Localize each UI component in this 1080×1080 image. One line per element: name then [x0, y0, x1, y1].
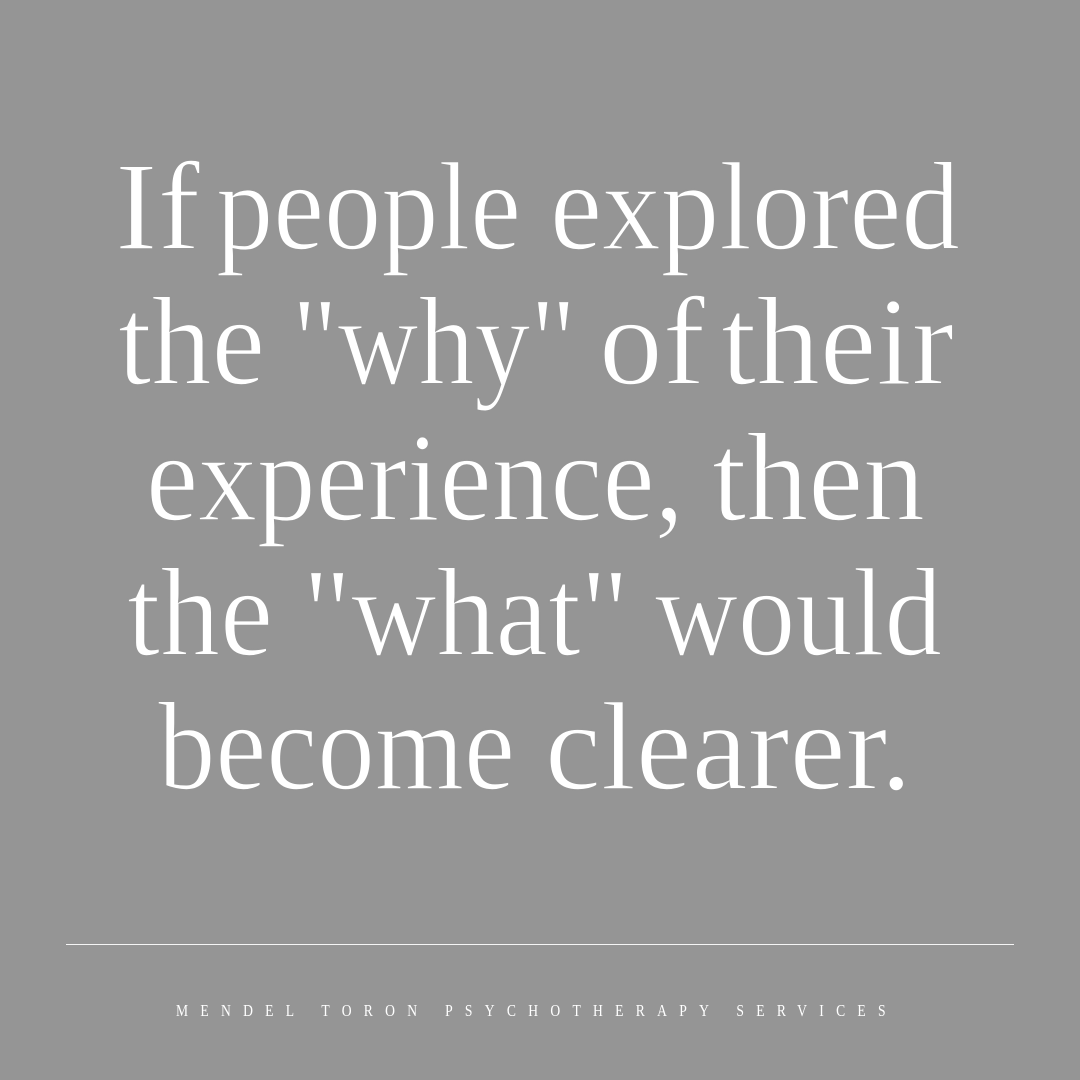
- quote text: [115, 138, 960, 817]
- quote text: become: [158, 678, 515, 817]
- quote text: "why": [292, 273, 576, 412]
- quote text: explored: [550, 138, 960, 277]
- quote text: their: [721, 273, 954, 412]
- quote text: then: [712, 409, 925, 548]
- quote text: the: [118, 273, 265, 412]
- quote text: experience,: [146, 409, 684, 548]
- quote text: the: [127, 544, 273, 683]
- quote text: If: [115, 138, 200, 277]
- quote text: clearer.: [545, 678, 912, 817]
- quote text: would: [655, 544, 942, 683]
- footer: organisation name: MENDEL TORON PSYCHOTHERAPY SERVICES: [176, 1002, 886, 1020]
- quote text: people: [216, 138, 521, 277]
- quote text: of: [599, 273, 705, 412]
- quote text: "what": [303, 544, 629, 683]
